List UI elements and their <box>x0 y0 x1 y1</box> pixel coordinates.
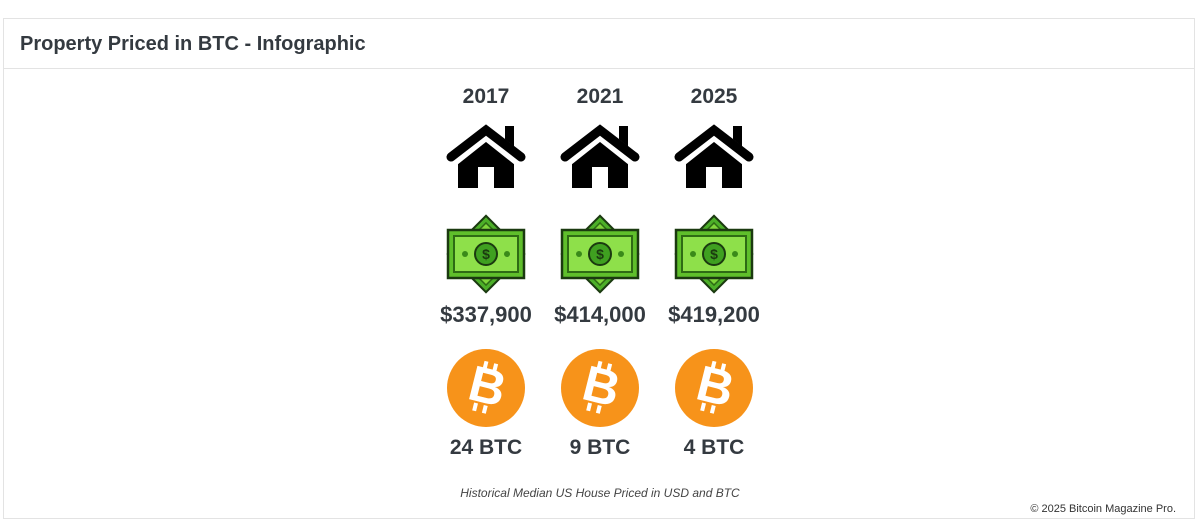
header bar <box>4 19 1194 69</box>
column 2025: 2025 <box>691 85 738 108</box>
column 2025: $419,200 <box>668 302 760 327</box>
column 2017: $337,900 <box>440 302 532 327</box>
column 2017: 24 BTC <box>450 436 522 459</box>
column 2021: $414,000 <box>554 302 646 327</box>
column 2021: 9 BTC <box>570 436 630 459</box>
title: Property Priced in BTC - Infographic <box>20 33 366 55</box>
column 2025: 4 BTC <box>684 436 744 459</box>
column 2025 <box>668 85 760 459</box>
column 2017 <box>440 85 532 459</box>
column 2017: 2017 <box>463 85 509 108</box>
footer copyright: © 2025 Bitcoin Magazine Pro. <box>1030 503 1176 515</box>
caption: Historical Median US House Priced in USD and BTC <box>460 486 740 500</box>
column 2021 <box>554 85 646 459</box>
column 2021: 2021 <box>577 85 624 108</box>
